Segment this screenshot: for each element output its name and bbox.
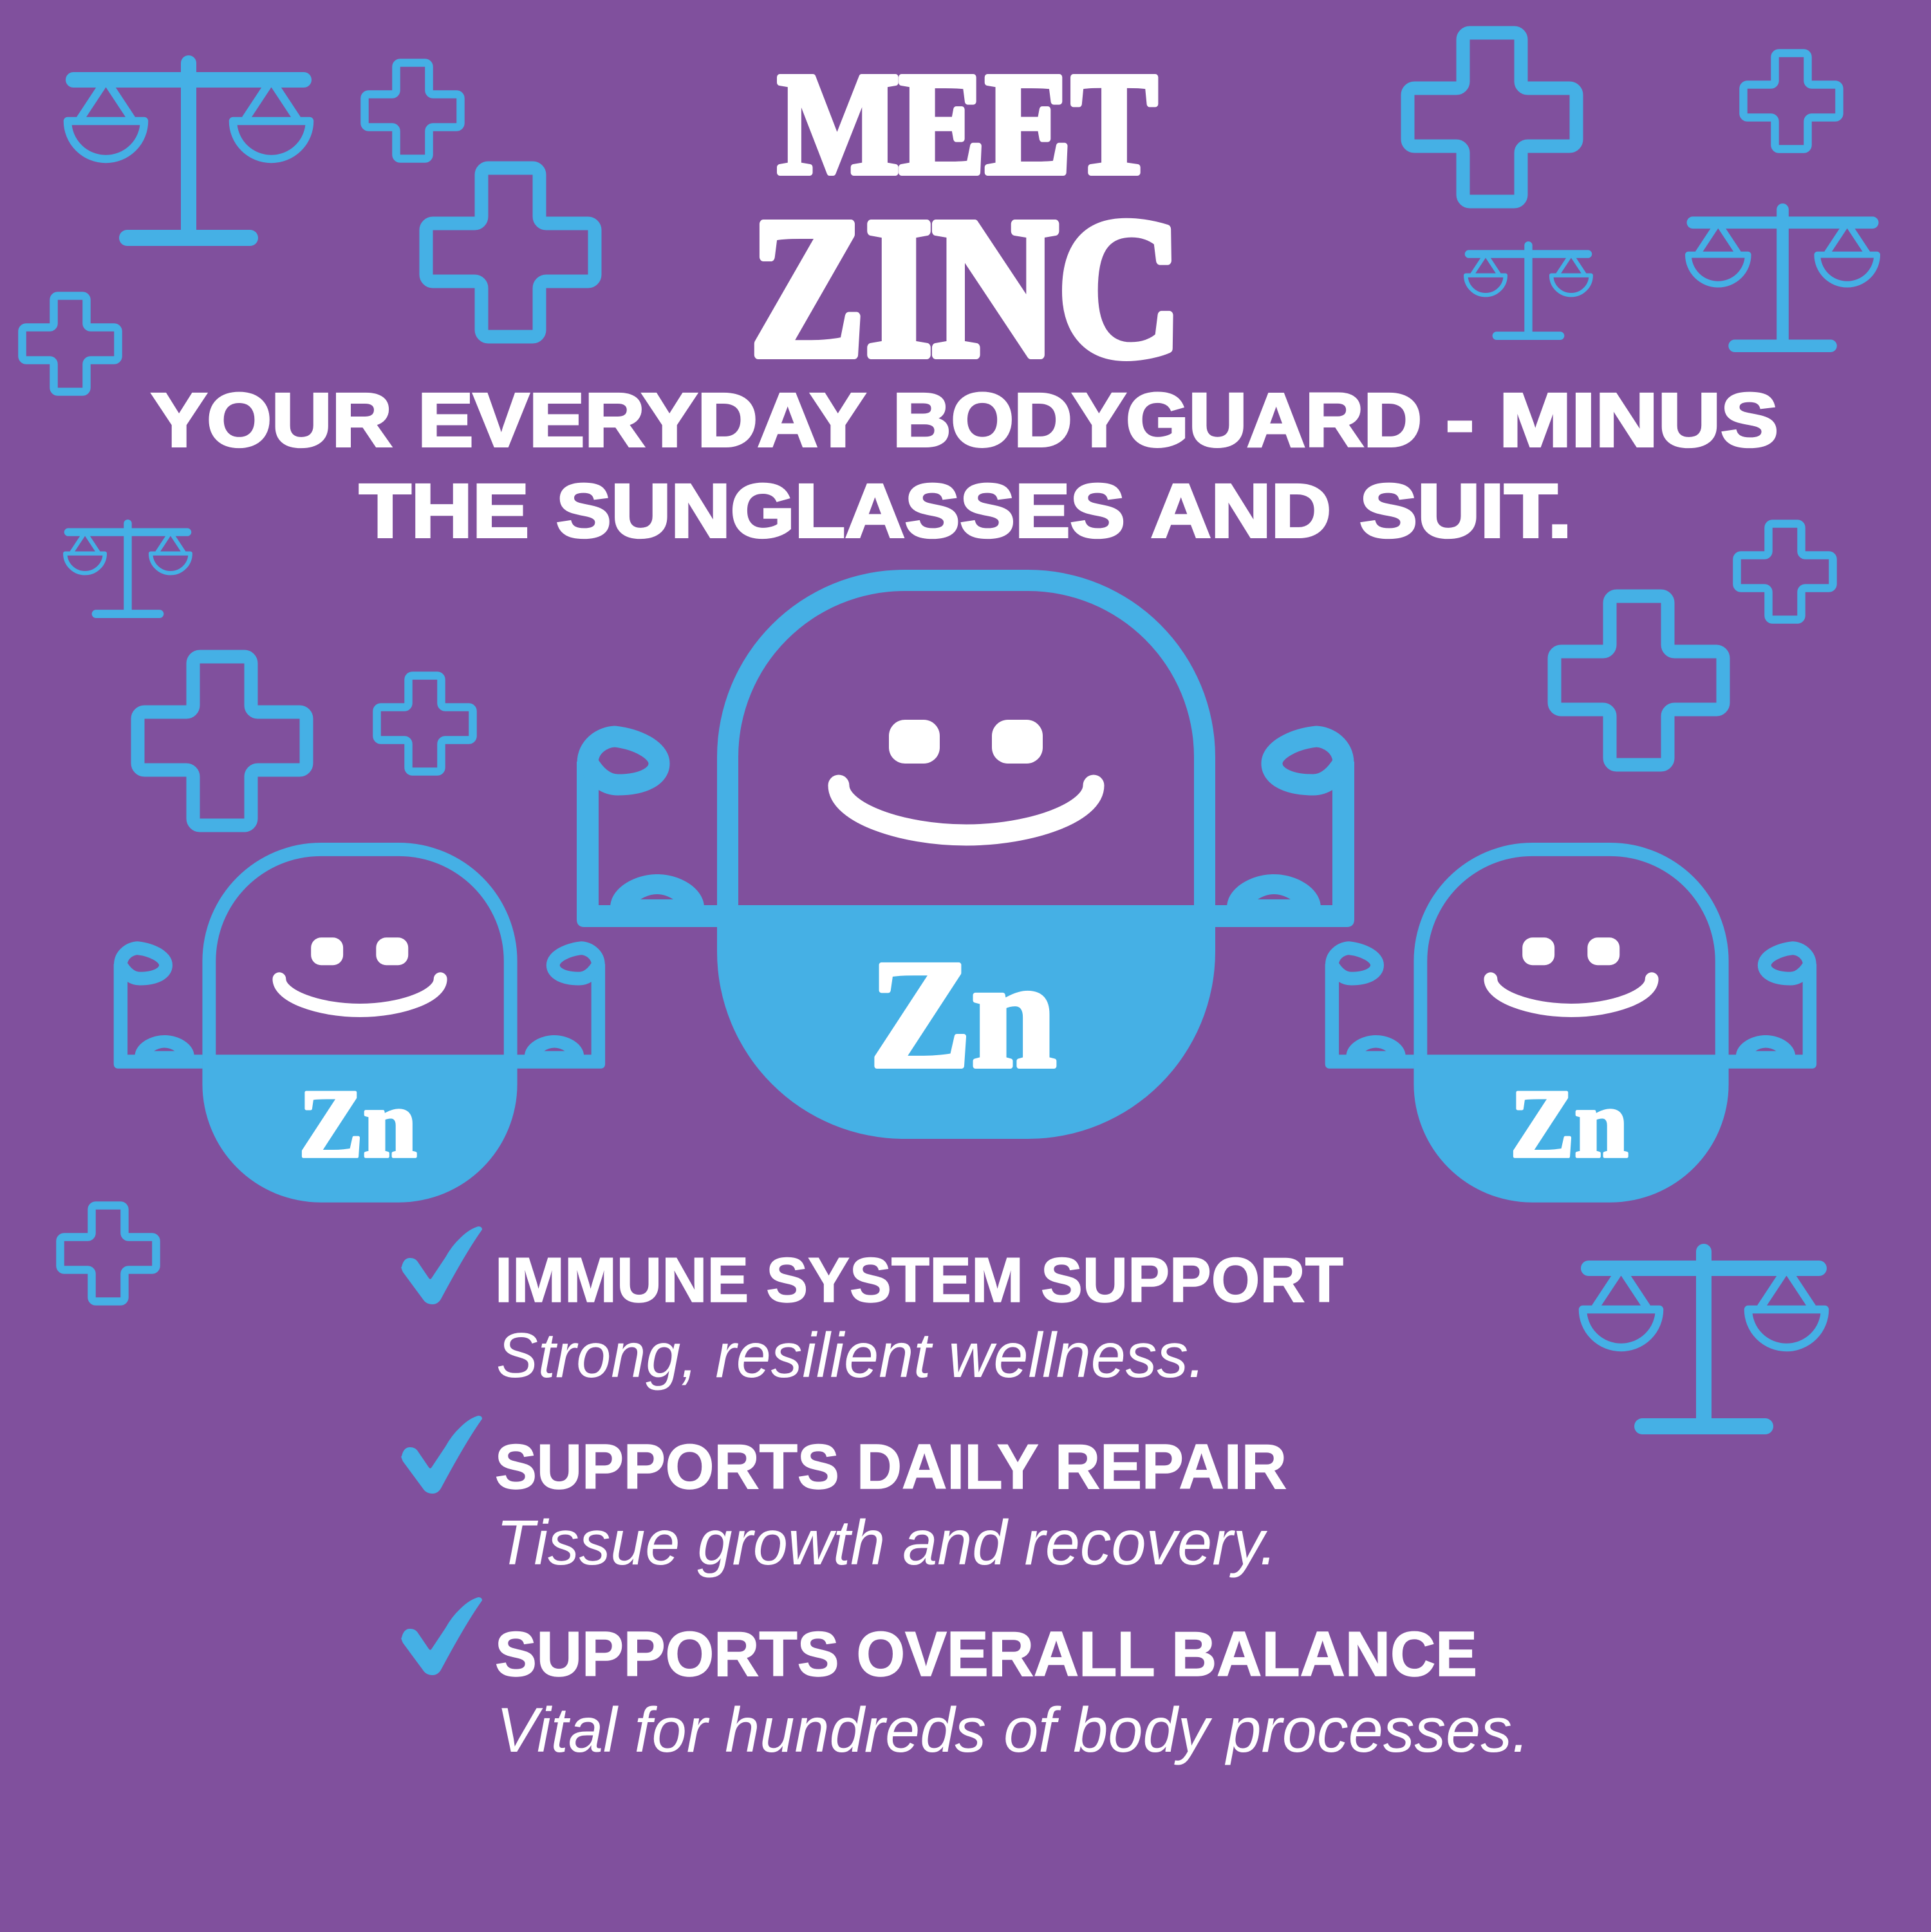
icon: small plus crosses <box>22 53 1840 1302</box>
title: Meet Zinc <box>750 43 1182 399</box>
label: Zn left: Zn <box>299 1069 417 1177</box>
character: large zinc mascot center <box>577 570 1354 1139</box>
label: Zn center: Zn <box>870 928 1056 1100</box>
subtitle: bodyguard tagline: EVERYDAY <box>418 378 866 463</box>
subtitle: bodyguard tagline: SUNGLASSES <box>556 469 1125 554</box>
benefit: immune system support <box>401 1226 1343 1391</box>
benefit: immune system support: Strong, resilient wellness. <box>496 1320 1206 1391</box>
benefit: supports daily repair <box>401 1416 1287 1578</box>
character: small zinc mascot left <box>114 843 605 1203</box>
icon: small scales top right <box>1465 241 1592 340</box>
title: Meet Zinc: MEET <box>778 43 1157 204</box>
benefit: immune system support: IMMUNE SYSTEM SUPPORT <box>495 1244 1343 1315</box>
icon: check mark 2 <box>401 1416 482 1494</box>
benefit: supports daily repair: Tissue growth and recovery. <box>496 1507 1277 1578</box>
benefit: supports overall balance: Vital for hundreds of body processes. <box>496 1694 1529 1765</box>
icon: large scales lower right <box>1581 1244 1827 1434</box>
icon: check mark 3 <box>401 1597 482 1675</box>
icon: check mark 1 <box>401 1226 482 1304</box>
subtitle: bodyguard tagline: MINUS <box>1499 378 1778 463</box>
benefit: supports overall balance: SUPPORTS OVERALL BALANCE <box>495 1618 1477 1689</box>
subtitle: bodyguard tagline: BODYGUARD <box>893 378 1422 463</box>
subtitle: bodyguard tagline: SUIT. <box>1359 469 1572 554</box>
benefit: supports daily repair: SUPPORTS DAILY REPAIR <box>495 1431 1287 1502</box>
subtitle: bodyguard tagline <box>151 378 1778 554</box>
subtitle: bodyguard tagline: - <box>1446 378 1474 463</box>
subtitle: bodyguard tagline: THE <box>359 469 529 554</box>
icon: medium scales top right <box>1687 203 1879 352</box>
character: small zinc mascot right <box>1325 843 1816 1203</box>
icon: small scales left <box>64 520 191 618</box>
icon: large scales top left <box>66 55 312 246</box>
subtitle: bodyguard tagline: YOUR <box>151 378 392 463</box>
subtitle: bodyguard tagline: AND <box>1151 469 1331 554</box>
label: Zn right: Zn <box>1510 1069 1628 1177</box>
title: Meet Zinc: ZINC <box>750 178 1182 399</box>
icon: large plus crosses <box>138 33 1723 825</box>
benefit: supports overall balance <box>401 1597 1529 1765</box>
